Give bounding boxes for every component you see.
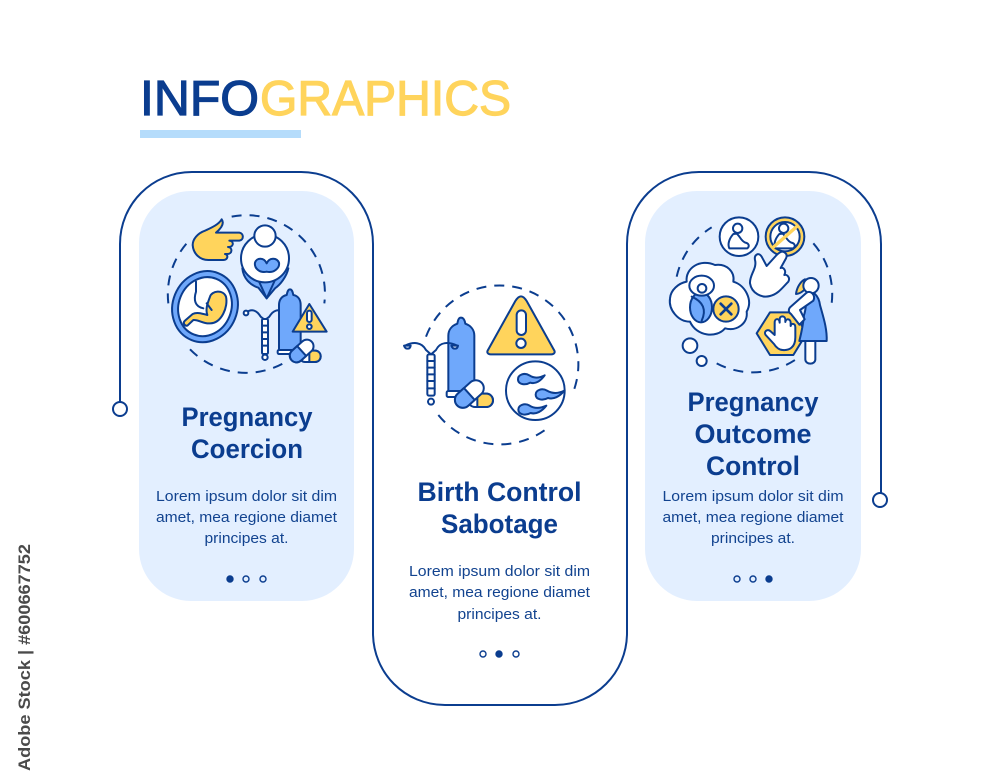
- icon: intrauterine device: [244, 310, 287, 360]
- icon: pregnancy outcome control cluster: [670, 217, 832, 372]
- text block: birth control sabotage: principes at.: [458, 607, 542, 623]
- text block: pregnancy coercion: [156, 489, 337, 547]
- icon: thought cloud: [670, 263, 749, 366]
- icon: condom: [278, 289, 301, 354]
- text block: pregnancy coercion: amet, mea regione diamet: [156, 510, 337, 526]
- panel: pregnancy outcome control background: [645, 191, 861, 601]
- icon: sperm under microscope: [506, 361, 565, 420]
- text block: birth control sabotage: amet, mea regione diamet: [409, 585, 590, 601]
- icon: fetus in womb: [162, 261, 248, 352]
- heading: pregnancy coercion: [182, 402, 312, 464]
- icon: child in circle: [720, 217, 758, 256]
- heading: pregnancy coercion: Pregnancy: [182, 402, 312, 432]
- icon: stop hexagon with hand: [757, 312, 807, 355]
- title: INFO: [140, 72, 259, 126]
- icon: pills: [452, 377, 493, 411]
- heading: pregnancy outcome control: Pregnancy: [688, 387, 818, 417]
- icon: intrauterine device: [404, 343, 458, 405]
- text block: birth control sabotage: Lorem ipsum dolor sit dim: [409, 564, 590, 580]
- connecting outline around panels: [113, 172, 887, 705]
- text block: pregnancy outcome control: amet, mea regione diamet: [662, 510, 844, 526]
- text block: pregnancy outcome control: Lorem ipsum dolor sit dim: [662, 489, 844, 505]
- pagination dots: panel three: [734, 576, 772, 582]
- icon: pregnant woman: [789, 278, 827, 364]
- heading: pregnancy outcome control: Outcome: [694, 419, 812, 449]
- heading: birth control sabotage: Sabotage: [441, 509, 558, 539]
- heading: birth control sabotage: Birth Control: [418, 477, 582, 507]
- icon: pregnancy coercion cluster: [162, 215, 327, 373]
- heading: birth control sabotage: [418, 477, 582, 539]
- title: GRAPHICS: [260, 72, 511, 126]
- icon: pointing hand: [750, 252, 789, 297]
- panel: pregnancy coercion background: [139, 191, 354, 601]
- icon: warning triangle: [293, 304, 327, 332]
- text block: pregnancy outcome control: principes at.: [711, 531, 795, 547]
- text block: pregnancy coercion: Lorem ipsum dolor sit dim: [156, 489, 337, 505]
- title underline: [140, 130, 301, 138]
- icon: pointing hand: [193, 219, 243, 260]
- heading: pregnancy coercion: Coercion: [191, 434, 303, 464]
- icon: pills: [287, 337, 321, 365]
- stock attribution text: Adobe Stock | #600667752: [15, 544, 34, 771]
- title: [140, 72, 511, 126]
- heading: pregnancy outcome control: Control: [706, 451, 800, 481]
- text block: pregnancy coercion: principes at.: [204, 531, 288, 547]
- icon: crossed out child: [766, 217, 804, 256]
- heading: pregnancy outcome control: [688, 387, 818, 481]
- pagination dots: panel one: [227, 576, 266, 582]
- text block: birth control sabotage: [409, 564, 590, 623]
- icon: pregnant woman from above: [241, 225, 289, 298]
- icon: condom: [447, 318, 474, 397]
- text block: pregnancy outcome control: [662, 489, 844, 547]
- pagination dots: panel two: [480, 651, 519, 657]
- icon: warning triangle: [487, 296, 555, 354]
- icon: birth control sabotage cluster: [404, 285, 578, 444]
